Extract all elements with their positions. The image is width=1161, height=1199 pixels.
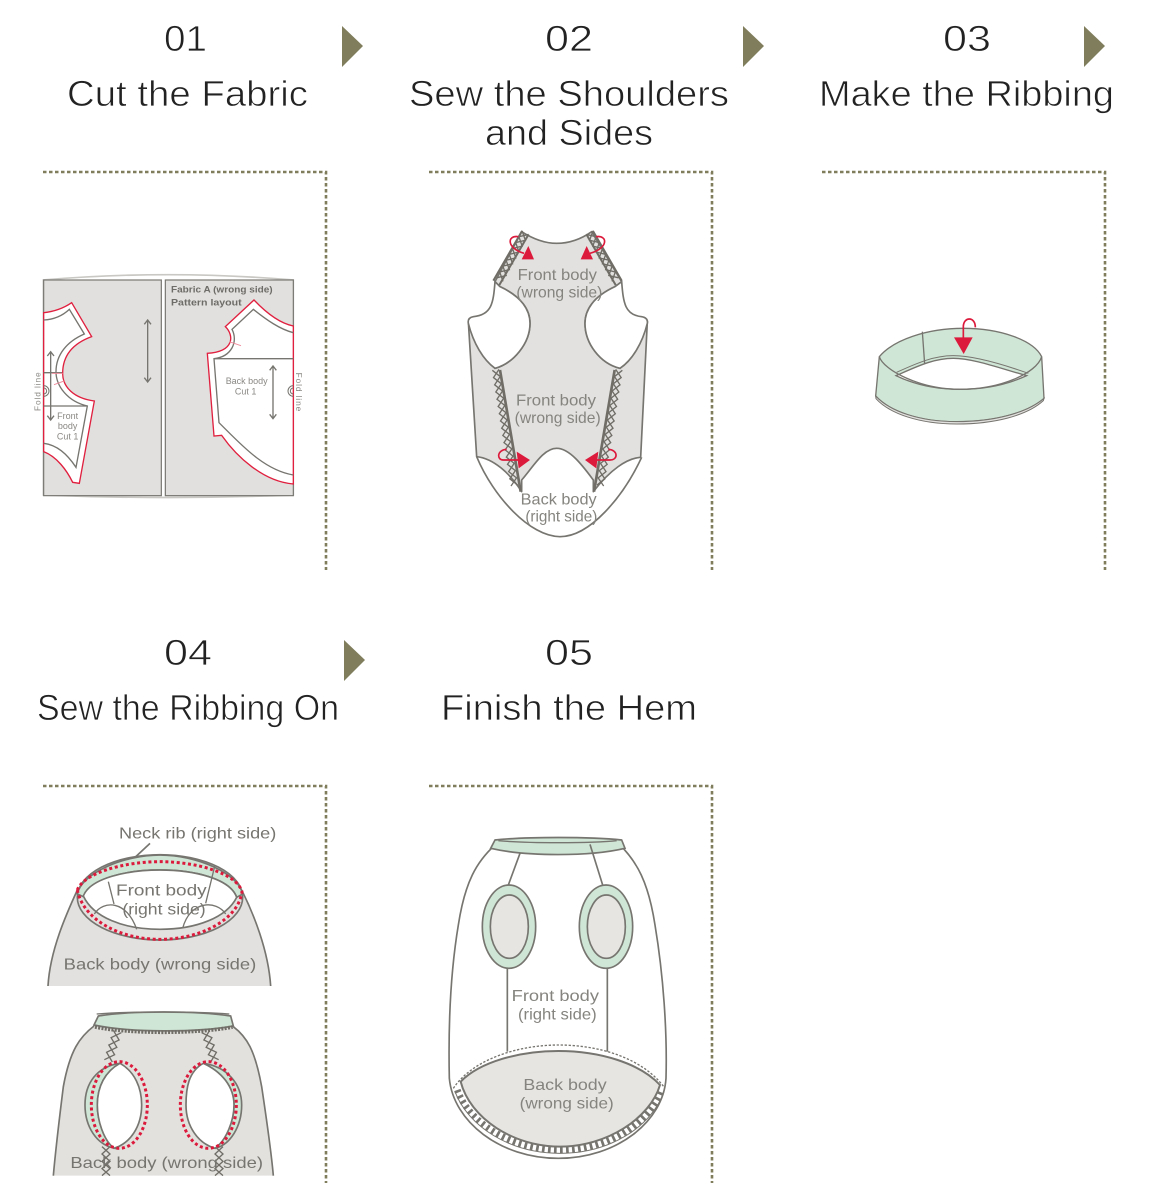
step 04 heading	[37, 632, 339, 728]
arrow: step 01 to 02	[342, 26, 363, 67]
back body piece: Back body	[226, 376, 268, 386]
step 03 heading: Make the Ribbing	[819, 73, 1114, 114]
panel 05: finished hem: Back body	[523, 1077, 607, 1094]
step 01 heading: 01	[164, 18, 207, 59]
panel 04 top: neck rib: (right side)	[122, 902, 206, 919]
step 01 heading	[67, 18, 308, 114]
step 02 heading	[409, 18, 729, 153]
labels	[515, 267, 602, 525]
panel 04 top: neck rib: Front body	[116, 882, 207, 899]
panel 04 top: neck rib	[48, 826, 276, 986]
panel 05: finished hem	[449, 837, 666, 1158]
front body piece: body	[58, 421, 78, 431]
step 05 heading: Finish the Hem	[441, 687, 697, 728]
panel 01: pattern layout	[33, 275, 304, 497]
step 05 heading	[441, 632, 697, 728]
panel 03: ribbing loop	[876, 319, 1044, 424]
front body piece: Cut 1	[57, 431, 78, 441]
fold marks	[44, 386, 293, 396]
panel 05: finished hem: (right side)	[518, 1007, 597, 1024]
front body piece: Front	[57, 411, 79, 421]
seam stitching	[492, 231, 622, 492]
labels: Front body	[518, 267, 597, 284]
step 01 heading: Cut the Fabric	[67, 73, 308, 114]
labels: Front body	[516, 393, 596, 410]
step 03 heading	[819, 18, 1114, 114]
labels: (wrong side)	[515, 410, 601, 427]
step 04 heading: Sew the Ribbing On	[37, 687, 339, 728]
step 03 heading: 03	[943, 18, 991, 59]
armhole flaps	[468, 282, 530, 368]
fold line labels: Fold line	[294, 373, 304, 412]
labels: (wrong side)	[516, 284, 602, 301]
arrow: step 02 to 03	[743, 26, 764, 67]
panel 05: finished hem: (wrong side)	[520, 1096, 614, 1113]
pattern layout caption: Pattern layout	[171, 297, 242, 307]
fold line labels	[33, 372, 304, 412]
labels: (right side)	[525, 508, 597, 525]
step 02 heading: Sew the Shoulders	[409, 73, 729, 114]
step 02 heading: and Sides	[485, 112, 653, 153]
panel 04 top: neck rib: Back body (wrong side)	[64, 956, 256, 973]
panel 04 bottom: armhole rib: Back body (wrong side)	[70, 1155, 263, 1172]
pattern layout caption	[171, 285, 273, 307]
armhole rings	[482, 885, 536, 968]
step 02 heading: 02	[545, 18, 593, 59]
step 05 heading: 05	[545, 632, 593, 673]
back body hem	[461, 1051, 660, 1147]
front body piece	[44, 303, 94, 483]
panel 02: shoulder and side seams	[468, 231, 647, 537]
red arrows	[499, 237, 616, 460]
fabric right half	[165, 280, 293, 496]
arrow: step 04 to 05	[344, 640, 365, 681]
red arrow	[954, 319, 975, 354]
front body shape	[468, 232, 647, 492]
step 04 heading: 04	[164, 632, 212, 673]
back body piece	[207, 300, 293, 484]
panel 04 top: neck rib: Neck rib (right side)	[119, 826, 276, 843]
back body piece: Cut 1	[235, 387, 256, 397]
fabric left half	[44, 280, 161, 496]
fold line labels: Fold line	[33, 372, 43, 411]
back body flap	[477, 457, 642, 537]
labels: Back body	[521, 492, 597, 509]
panel 04 bottom: armhole rib	[53, 1012, 273, 1176]
grain arrow	[144, 320, 151, 382]
pattern layout caption: Fabric A (wrong side)	[171, 285, 273, 295]
panel 05: finished hem: Front body	[512, 988, 599, 1005]
arrow: step 03	[1084, 26, 1105, 67]
